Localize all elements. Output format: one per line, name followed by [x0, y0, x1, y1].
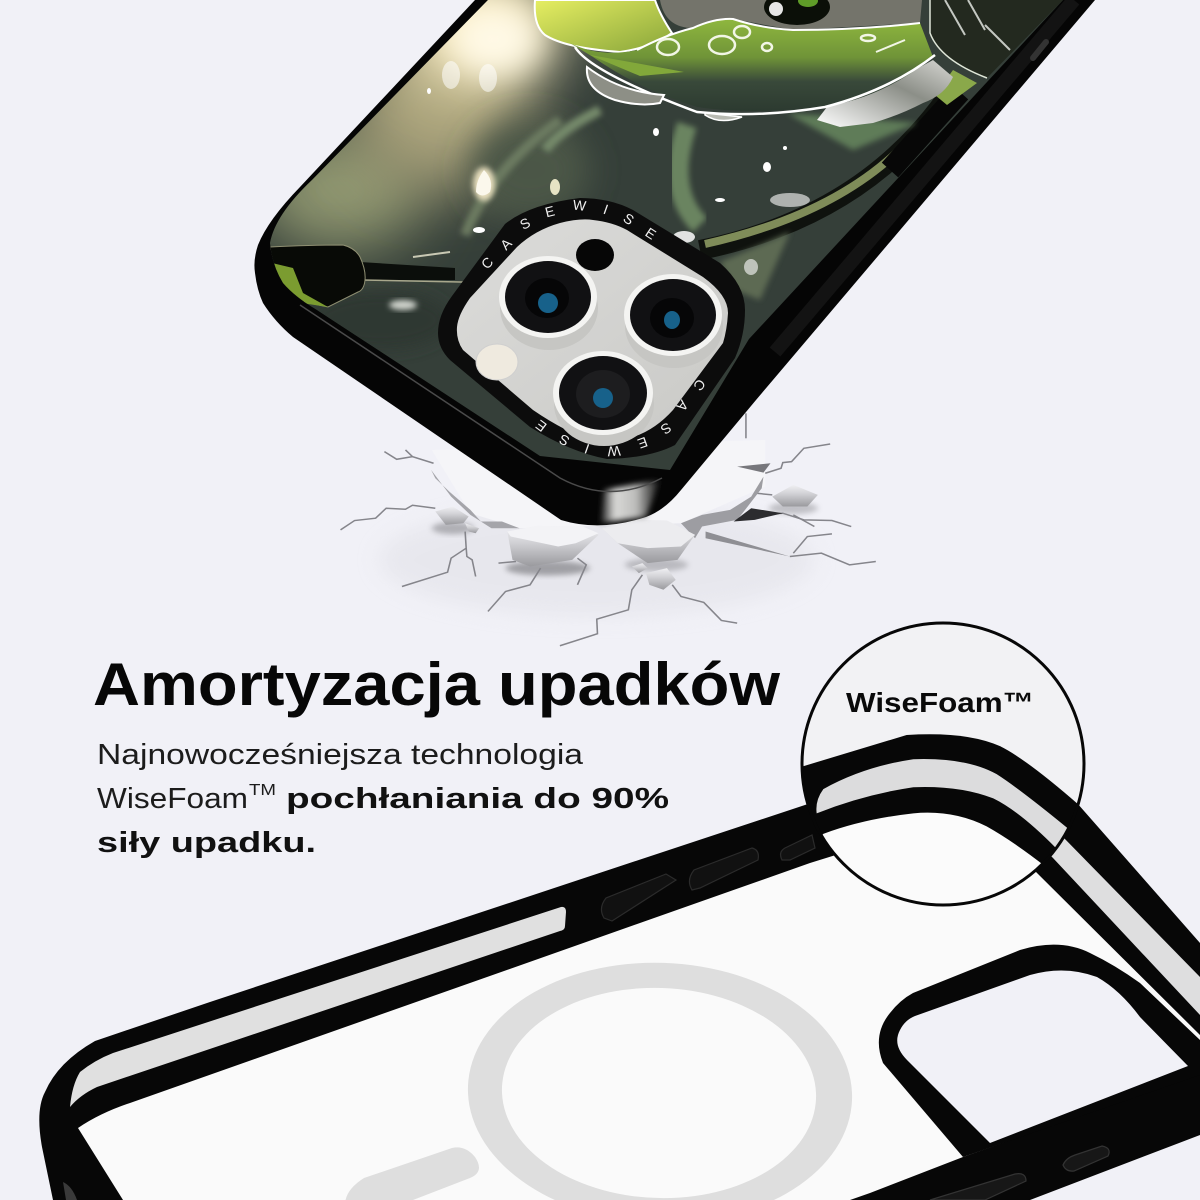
- description text: TM: [249, 782, 276, 799]
- magnifier callout: WiseFoam detail: [800, 622, 1086, 906]
- impact cracks in the ground: [341, 413, 876, 646]
- bright green tip: [935, 70, 977, 105]
- lighter side strip: [775, 0, 1074, 352]
- grey centre: [660, 0, 922, 30]
- description text: Najnowocześniejsza technologia: [97, 739, 584, 771]
- MagSafe alignment bar: [345, 1147, 479, 1200]
- description text: [97, 739, 669, 859]
- MagSafe ring: [468, 963, 852, 1200]
- blade under feather: [787, 113, 917, 150]
- lens 3: [553, 351, 654, 446]
- camera bumper: [438, 198, 745, 459]
- camera cutout: [897, 970, 1188, 1143]
- white feather petal: [817, 60, 953, 127]
- magnified bumper detail: [804, 734, 1077, 904]
- artwork with green leaf: [270, 0, 1063, 470]
- description text: siły upadku.: [97, 827, 316, 859]
- description text: WiseFoam: [97, 783, 248, 815]
- lower edge buttons: [930, 1146, 1109, 1200]
- left foam slot: [70, 907, 566, 1107]
- lower blade: [720, 232, 790, 300]
- lens 2: [624, 274, 723, 368]
- microphone hole: [576, 239, 614, 271]
- yellow leaf: [535, 0, 672, 52]
- flash: [476, 344, 518, 380]
- clear back panel: [78, 835, 1200, 1200]
- corner highlight on the case: [600, 480, 660, 523]
- right dark leaf: [930, 0, 1063, 78]
- lens 1: [499, 256, 598, 350]
- heading: Amortyzacja upadków: [93, 651, 780, 718]
- description text: pochłaniania do 90%: [286, 783, 669, 815]
- right foam slot: [1025, 805, 1200, 1015]
- main green leaf: [570, 19, 935, 114]
- stem: [700, 92, 960, 250]
- case body: [254, 0, 1095, 525]
- brand text top: CASEWISE: [482, 200, 656, 268]
- side button: [1033, 42, 1046, 58]
- upper phone in black case: [254, 0, 1095, 527]
- bumper inner edge line: [300, 305, 662, 492]
- volume buttons: [601, 835, 815, 921]
- brand text bottom: CASEWISE: [535, 380, 704, 456]
- lower case seen from the inside: [39, 760, 1200, 1200]
- callout label: WiseFoam™: [846, 687, 1034, 718]
- camera plate: [457, 219, 728, 443]
- black water drop: [764, 0, 830, 25]
- small bottom port: [63, 1182, 77, 1200]
- dark bud at left: [270, 244, 463, 308]
- case frame: [39, 760, 1200, 1200]
- camera cutout ring: [879, 945, 1200, 1157]
- sparkles and water drops: [427, 61, 810, 275]
- droplets under leaf: [587, 67, 742, 121]
- camera module: [438, 198, 745, 459]
